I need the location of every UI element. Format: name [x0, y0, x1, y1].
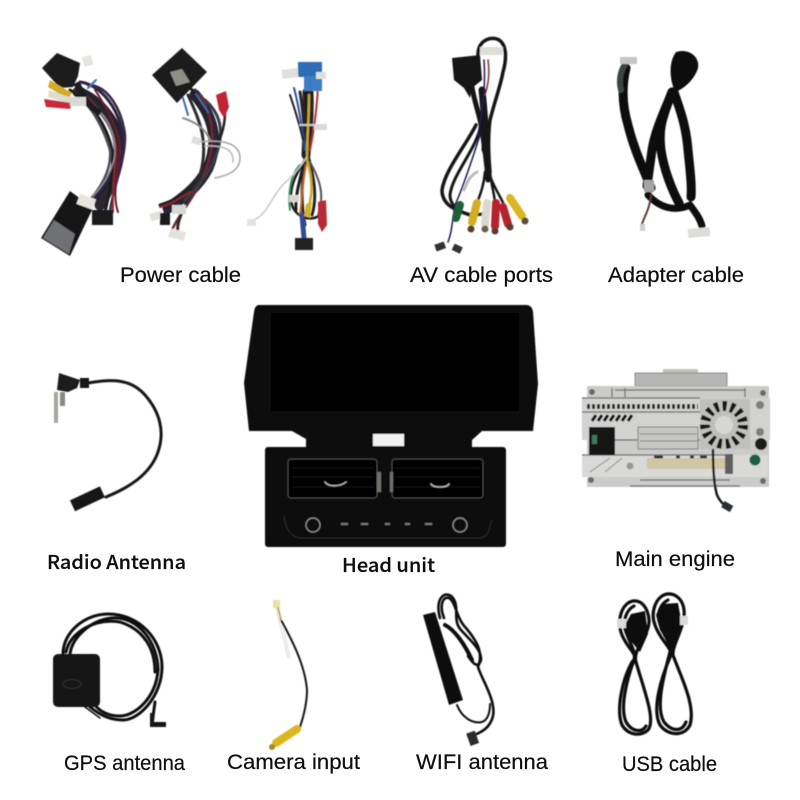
- beige connectors: [647, 458, 727, 469]
- power cable harness 1: [41, 53, 125, 256]
- title: WIFI antenna: WIFI antenna: [416, 751, 548, 774]
- connector: black module: [152, 48, 207, 103]
- head unit: [244, 305, 538, 547]
- title: Camera input: Camera input: [227, 751, 360, 774]
- title: Main engine: Main engine: [615, 548, 735, 571]
- lower panel: [265, 447, 506, 547]
- plates: [638, 427, 698, 449]
- engine cable: [713, 450, 727, 507]
- power cable harness 3: [247, 62, 327, 250]
- control strip: [284, 516, 492, 538]
- AV cable: [434, 38, 528, 254]
- WIFI antenna: [423, 595, 493, 746]
- screen bezel: [244, 305, 538, 431]
- title: AV cable ports: AV cable ports: [410, 264, 553, 287]
- main engine: [582, 369, 770, 512]
- title: Radio Antenna: Radio Antenna: [47, 548, 186, 575]
- GPS antenna: [53, 614, 166, 727]
- power cable harness 2: [149, 48, 240, 241]
- stand: [292, 431, 482, 447]
- connector: blue plugs: [298, 62, 322, 77]
- connector: black adapter box: [452, 55, 482, 98]
- vents: [288, 459, 483, 498]
- black connector: [589, 427, 615, 455]
- connector: module box with label: [41, 191, 93, 256]
- title: GPS antenna: GPS antenna: [64, 752, 185, 775]
- knobs and screws: [755, 438, 767, 450]
- USB cable: [617, 594, 691, 734]
- camera input: [269, 600, 307, 750]
- title: Power cable: Power cable: [120, 264, 241, 287]
- hazard stripes: [592, 415, 632, 421]
- perforated strip: [587, 404, 698, 409]
- fan: [700, 399, 750, 449]
- RCA plugs: [456, 198, 522, 226]
- title: USB cable: USB cable: [622, 753, 717, 776]
- title: Head unit: Head unit: [342, 551, 435, 578]
- title: Adapter cable: Adapter cable: [608, 264, 744, 287]
- adapter cable: [620, 51, 710, 238]
- connector: top-left black block: [42, 53, 80, 88]
- radio antenna: [54, 373, 161, 511]
